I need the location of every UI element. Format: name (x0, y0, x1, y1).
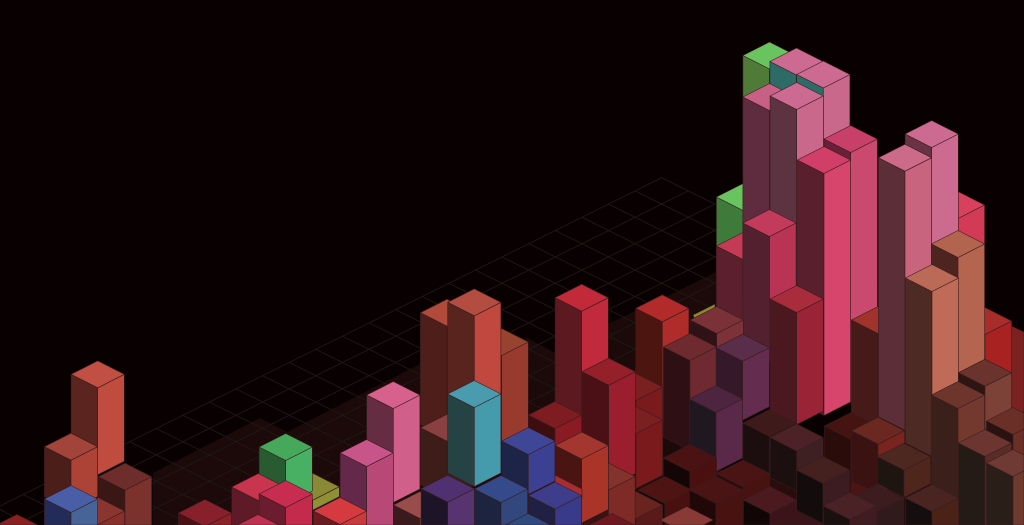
bar: brick low 608 (582, 463, 635, 525)
bar: maroon middle (663, 334, 717, 450)
bar: crimson short (743, 210, 796, 362)
bar: pink tall left (367, 382, 420, 502)
bar: pink back (770, 48, 823, 155)
bar: crimson small left (232, 474, 285, 525)
bar: blue left (44, 486, 98, 525)
bar: rust mid (851, 417, 905, 494)
bar: crimson pink (824, 126, 877, 402)
bar: light low 687 (660, 506, 713, 525)
bar: maroon behind (824, 412, 878, 500)
bar: maroon left (98, 463, 152, 525)
bar: umber mid (877, 443, 931, 497)
bar: green top (743, 42, 796, 149)
bar: red low (313, 498, 367, 525)
bar: dark low 770 (743, 410, 796, 476)
floor shadow area (153, 272, 716, 525)
bar: crimson small right (259, 480, 312, 525)
bar: salmon tall (448, 289, 501, 416)
bar: dark low 743 (716, 460, 770, 517)
bar: dark low 850 (823, 492, 877, 525)
bar: low muted rose (420, 414, 474, 498)
bar: purple lower (689, 386, 743, 472)
bar: red middle stack back (636, 295, 689, 422)
bar: indigo upper (502, 428, 555, 494)
bar: olive (286, 473, 339, 510)
bar: pink tall (878, 144, 932, 430)
bar: blue front (474, 476, 528, 525)
bar: maroon top (690, 306, 743, 374)
bar: dark low 932 (905, 484, 959, 525)
bar: brick behind (475, 328, 528, 442)
bar: red behind (716, 232, 770, 350)
bar: brick 582 (555, 432, 608, 523)
bar: pink third (770, 82, 823, 290)
bar: brown corner (986, 450, 1024, 525)
bar: brown mid (931, 382, 985, 525)
bar: brown low (958, 430, 1012, 525)
bar: red tall (555, 284, 608, 441)
bar: salmon right (931, 230, 985, 388)
bar: pink left (743, 84, 796, 310)
bar: green lower (716, 184, 770, 290)
bar: dark low 716 (689, 476, 743, 525)
bar: red stack rear (609, 374, 663, 488)
red sliver (555, 475, 582, 499)
bar: dark low 636 (609, 492, 663, 525)
bar: crimson tallest (797, 146, 851, 416)
bar: brown edge (986, 408, 1024, 494)
bar: rose low (393, 492, 447, 525)
bar: indigo right (528, 482, 582, 525)
bar: dark low 665 (638, 476, 692, 525)
bar: green small (259, 434, 312, 504)
bar: dark red low left (178, 500, 232, 525)
bar: salmon left tall (420, 299, 474, 438)
bar: purple upper (716, 334, 769, 420)
bar: brown right (958, 359, 1012, 446)
bar: crimson bottom centre (589, 514, 635, 525)
bar: tall red left (71, 361, 124, 475)
bar: pink right (905, 120, 958, 298)
bar: crimson bottom (237, 514, 279, 525)
bar: dark low 823 (796, 456, 850, 524)
bar: dark red low (528, 402, 582, 458)
bar: purple low (421, 475, 474, 525)
bar: brick left (44, 433, 98, 510)
bar: red front (770, 286, 823, 424)
bar: dark low 690 (663, 444, 717, 502)
bar: red far right (931, 192, 985, 258)
bar: red right edge (958, 308, 1012, 424)
bar: dark low 877 (850, 484, 904, 525)
bar: dark low 797 (770, 424, 823, 491)
olive sliver (693, 304, 715, 320)
bar: dark low 770 front (743, 486, 797, 525)
bar: pink second (797, 61, 850, 238)
bar: salmon front (905, 264, 959, 456)
bar: red stack front (609, 406, 663, 488)
bar: magenta left (340, 440, 393, 525)
lower dark fill (640, 470, 1024, 525)
bar: dark low 797 front (770, 512, 824, 525)
bar: teal (448, 380, 501, 486)
bar: blue bottom (505, 514, 551, 525)
bar: red second (582, 358, 635, 487)
floor grid (0, 178, 928, 525)
bar: brick low left (71, 498, 125, 525)
bar: tiny red corner (0, 514, 38, 525)
bar: far right maroon (1011, 326, 1024, 418)
bar: dark red behind (851, 306, 905, 430)
